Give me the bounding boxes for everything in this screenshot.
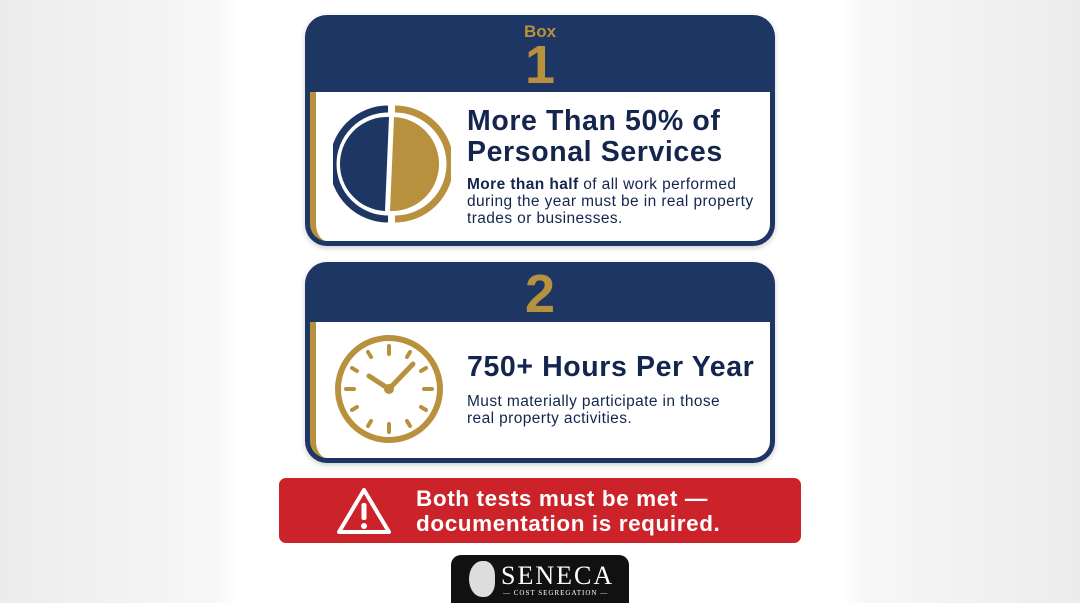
icon: warning [337, 488, 392, 534]
text 1: trades or businesses. [467, 210, 623, 227]
text 2 [467, 393, 720, 427]
icon: clock [335, 335, 443, 443]
logo: — COST SEGREGATION — [503, 589, 608, 597]
number 1: 1 [525, 35, 555, 95]
number 2: 2 [525, 264, 555, 324]
text 1 [467, 176, 754, 227]
banner text: Both tests must be met — [416, 486, 708, 511]
logo head [469, 561, 495, 597]
heading 1: Personal Services [467, 136, 723, 168]
text 2: Must materially participate in those [467, 393, 720, 410]
heading 1 [467, 105, 723, 168]
text 1: More than half of all work performed [467, 176, 736, 193]
heading 2: 750+ Hours Per Year [467, 351, 754, 383]
panel: box 1 [305, 15, 775, 246]
text 2: real property activities. [467, 410, 632, 427]
banner text [416, 486, 720, 536]
label: Box: Box [524, 22, 556, 41]
banner text: documentation is required. [416, 511, 720, 536]
logo [451, 555, 629, 603]
callout: warning banner [279, 478, 801, 543]
icon: pie half [333, 106, 451, 222]
body 2 [310, 322, 770, 458]
logo text: SENECA [501, 561, 614, 590]
text 1: during the year must be in real property [467, 193, 754, 210]
heading 1: More Than 50% of [467, 105, 720, 137]
body 1 [310, 92, 770, 241]
panel: box 2 [305, 262, 775, 463]
